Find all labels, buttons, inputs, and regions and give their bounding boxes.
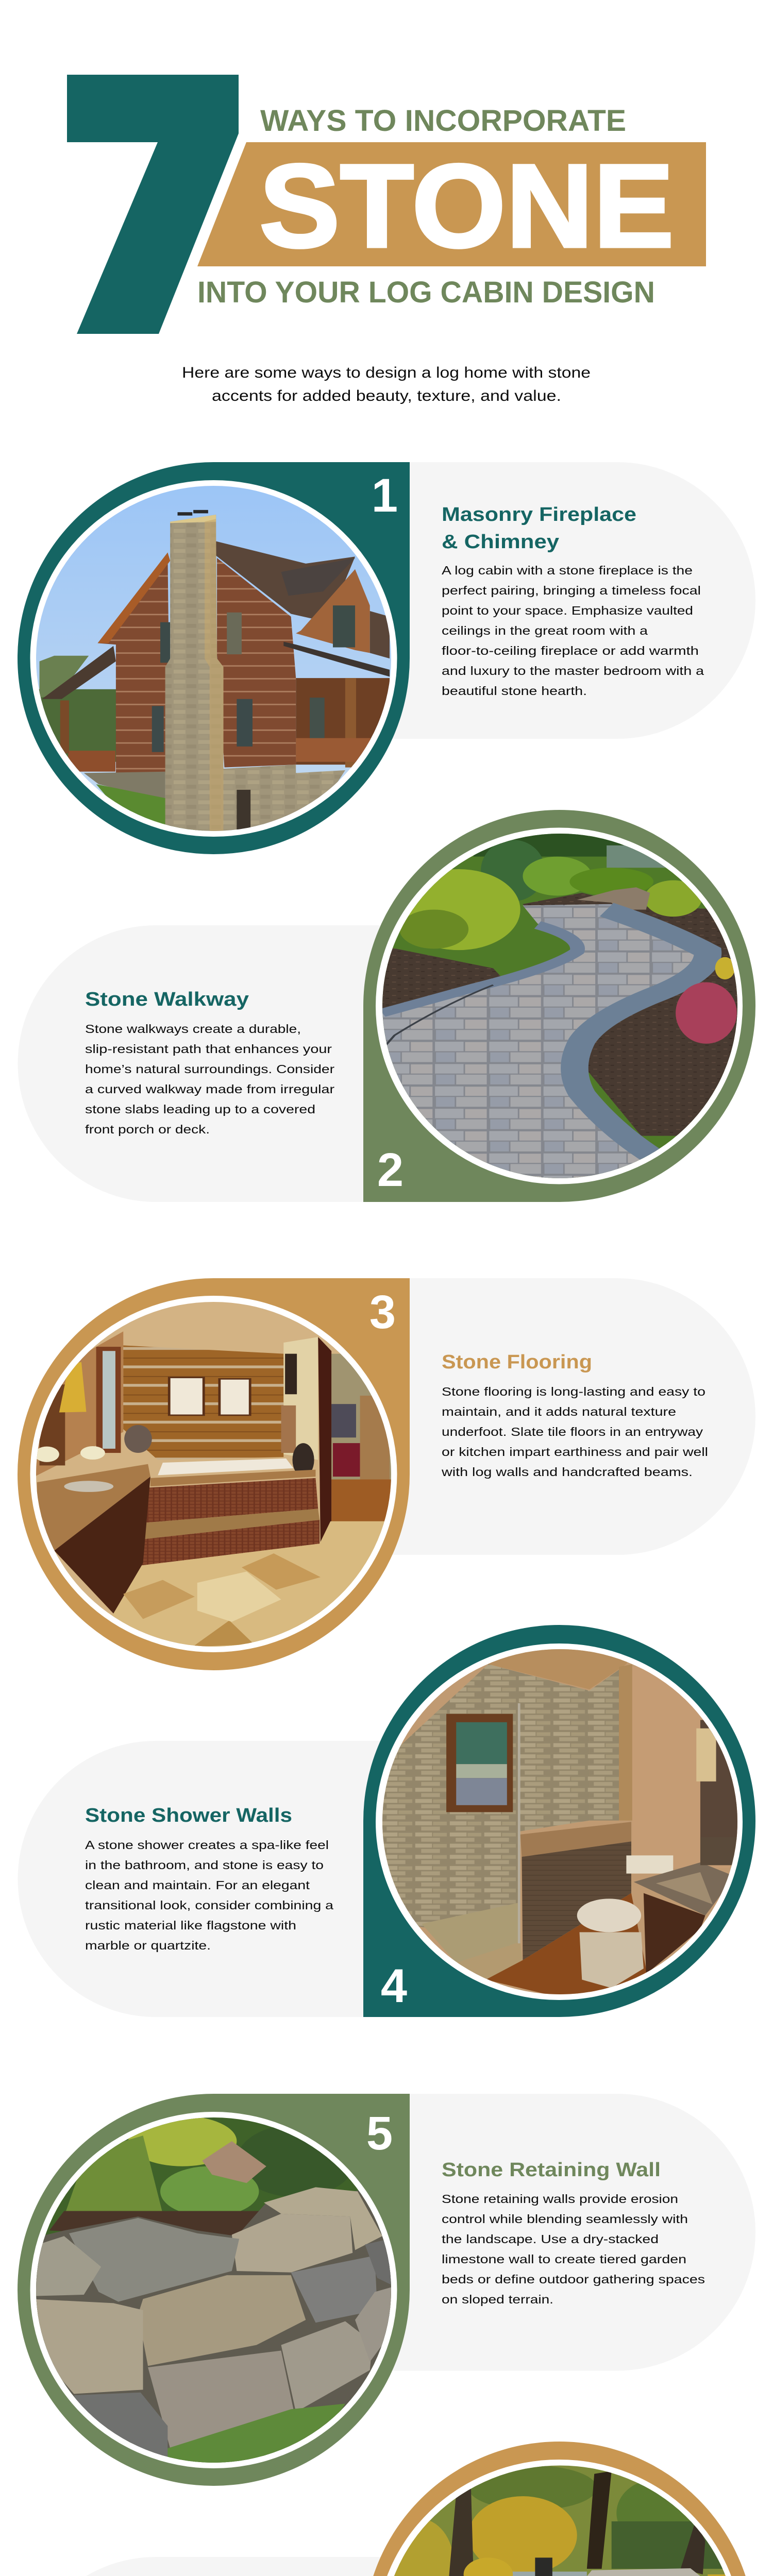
heading: Stone Shower Walls bbox=[85, 1805, 292, 1826]
panel: stone shower walls bbox=[18, 1625, 755, 2017]
heading: Masonry Fireplace bbox=[442, 504, 636, 526]
body text bbox=[85, 1022, 334, 1136]
white ring bbox=[376, 2460, 743, 2576]
body text: transitional look, consider combining a bbox=[85, 1899, 333, 1912]
body text: the landscape. Use a dry-stacked bbox=[442, 2232, 659, 2246]
panel: stone flooring bbox=[18, 1278, 755, 1670]
body text: clean and maintain. For an elegant bbox=[85, 1878, 310, 1892]
body text: marble or quartzite. bbox=[85, 1939, 211, 1952]
photo: bathroom with stone floor bbox=[29, 1298, 399, 1655]
gold circle frame bbox=[18, 1278, 410, 1670]
body text: perfect pairing, bringing a timeless focal bbox=[442, 584, 701, 597]
body text: in the bathroom, and stone is easy to bbox=[85, 1858, 324, 1872]
number 5: 5 bbox=[366, 2107, 393, 2160]
body text bbox=[85, 1838, 333, 1952]
heading: & Chimney bbox=[442, 531, 559, 553]
body text: limestone wall to create tiered garden bbox=[442, 2252, 686, 2266]
body text: front porch or deck. bbox=[85, 1123, 210, 1136]
white ring bbox=[30, 480, 397, 837]
white ring bbox=[376, 827, 743, 1184]
body text: control while blending seamlessly with bbox=[442, 2212, 688, 2226]
intro text: Here are some ways to design a log home with stone bbox=[182, 364, 591, 381]
body text bbox=[442, 564, 704, 698]
body text: ceilings in the great room with a bbox=[442, 624, 648, 637]
body text: or kitchen impart earthiness and pair well bbox=[442, 1445, 708, 1459]
body text bbox=[441, 1385, 708, 1479]
header title bbox=[67, 75, 706, 334]
body text: beautiful stone hearth. bbox=[442, 684, 587, 698]
body text: slip-resistant path that enhances your bbox=[85, 1042, 332, 1056]
white ring bbox=[376, 1643, 743, 2000]
number 4: 4 bbox=[381, 1960, 407, 2012]
gold banner bbox=[197, 142, 706, 266]
body text: A log cabin with a stone fireplace is the bbox=[442, 564, 693, 577]
gray text card bbox=[18, 2557, 515, 2576]
white ring bbox=[30, 2112, 397, 2468]
photo: stone shower bbox=[375, 1645, 745, 1999]
heading line three: INTO YOUR LOG CABIN DESIGN bbox=[197, 276, 655, 309]
teal circle frame bbox=[363, 1625, 755, 2017]
gray text card bbox=[18, 1741, 515, 2017]
body text: maintain, and it adds natural texture bbox=[442, 1405, 676, 1418]
photo: outdoor kitchen bbox=[394, 2466, 726, 2576]
intro text bbox=[182, 364, 591, 404]
heading bbox=[442, 504, 636, 553]
heading: Stone Flooring bbox=[442, 1351, 592, 1373]
body text: a curved walkway made from irregular bbox=[85, 1082, 334, 1096]
panel: masonry outdoor kitchen bbox=[87, 2442, 746, 2576]
body text: with log walls and handcrafted beams. bbox=[441, 1465, 693, 1479]
panel: stone walkway bbox=[18, 810, 755, 1202]
gray text card bbox=[258, 462, 755, 739]
big numeral seven bbox=[67, 75, 239, 334]
word stone: STONE bbox=[259, 140, 674, 272]
photo: curved stone walkway bbox=[375, 828, 745, 1183]
body text: Stone retaining walls provide erosion bbox=[442, 2192, 678, 2206]
green circle frame bbox=[363, 810, 755, 1202]
photo: log cabin with chimney bbox=[29, 483, 399, 835]
white ring bbox=[30, 1296, 397, 1652]
teal circle frame bbox=[18, 462, 410, 854]
gray text card bbox=[18, 925, 515, 1202]
number 1: 1 bbox=[372, 469, 398, 522]
gold circle frame bbox=[363, 2442, 755, 2576]
heading line one: WAYS TO INCORPORATE bbox=[260, 104, 626, 138]
heading: Stone Retaining Wall bbox=[442, 2159, 661, 2181]
gray text card bbox=[258, 2094, 755, 2371]
photo: boulder retaining wall bbox=[29, 2113, 399, 2471]
body text: floor-to-ceiling fireplace or add warmth bbox=[442, 644, 699, 657]
body text: Stone flooring is long-lasting and easy to bbox=[442, 1385, 705, 1398]
gray text card bbox=[258, 1278, 755, 1555]
body text bbox=[442, 2192, 705, 2306]
body text: stone slabs leading up to a covered bbox=[85, 1103, 315, 1116]
body text: home’s natural surroundings. Consider bbox=[85, 1062, 334, 1076]
body text: point to your space. Emphasize vaulted bbox=[442, 604, 693, 617]
panel: masonry fireplace and chimney bbox=[18, 462, 755, 854]
heading: Stone Walkway bbox=[85, 989, 249, 1010]
number 2: 2 bbox=[377, 1144, 404, 1196]
green circle frame bbox=[18, 2094, 410, 2486]
body text: beds or define outdoor gathering spaces bbox=[442, 2273, 705, 2286]
body text: A stone shower creates a spa-like feel bbox=[85, 1838, 329, 1852]
body text: and luxury to the master bedroom with a bbox=[442, 664, 704, 677]
body text: on sloped terrain. bbox=[442, 2293, 553, 2306]
body text: Stone walkways create a durable, bbox=[85, 1022, 301, 1036]
intro text: accents for added beauty, texture, and value. bbox=[212, 387, 561, 404]
panel: stone retaining wall bbox=[18, 2094, 755, 2486]
body text: underfoot. Slate tile floors in an entryway bbox=[442, 1425, 703, 1438]
number 3: 3 bbox=[369, 1286, 396, 1338]
body text: rustic material like flagstone with bbox=[85, 1919, 296, 1932]
